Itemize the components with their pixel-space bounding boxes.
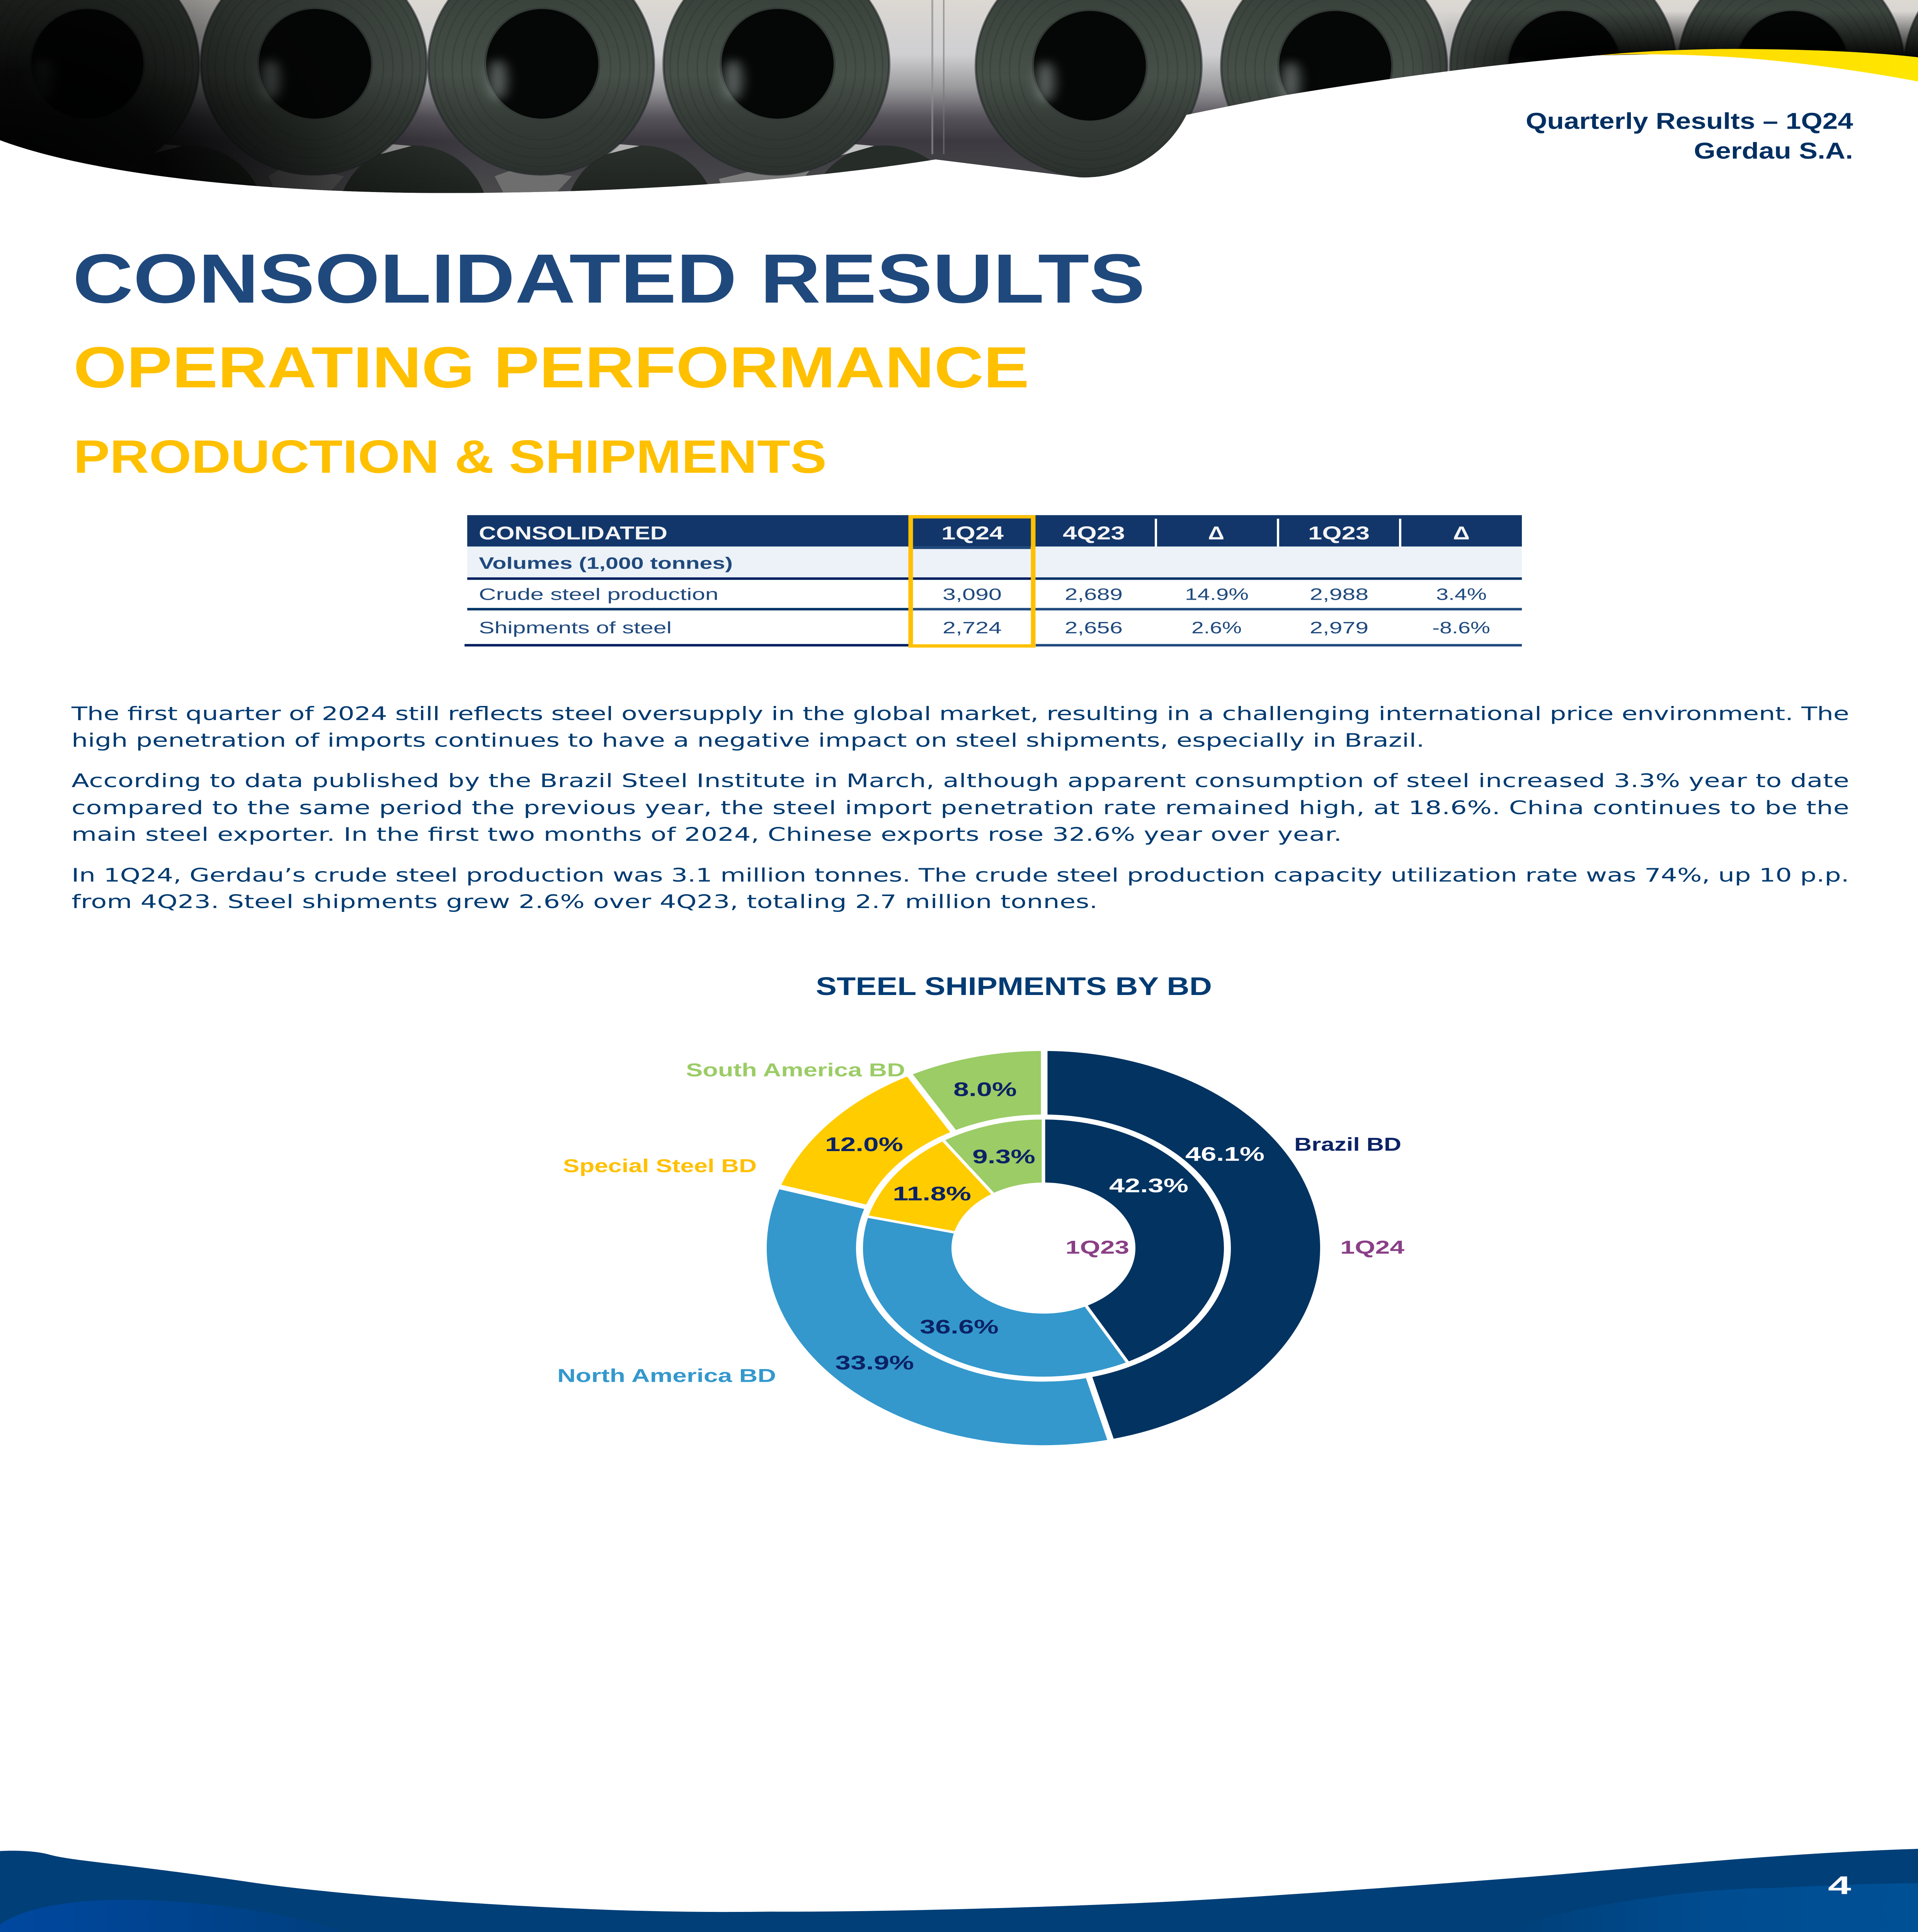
text block: market commentary: In 1Q24, Gerdau’s crude steel production was 3.1 million tonnes. The crude steel production capacity utilization rate was 74%, up 10 p.p.: [71, 864, 1849, 886]
table header row: 1Q24: [941, 523, 1004, 544]
table: consolidated volumes: [465, 515, 1522, 646]
data labels: [825, 1078, 1264, 1374]
table header row: [479, 523, 1470, 544]
header yellow swoosh: [1597, 49, 1918, 82]
footer wave: [0, 1849, 1918, 1932]
series label: 1Q23: 1Q23: [1065, 1237, 1129, 1258]
table row: crude steel production: 14.9%: [1185, 585, 1249, 604]
table header row: Δ: [1208, 523, 1224, 544]
heading: operating performance: OPERATING PERFORMANCE: [73, 335, 1029, 400]
data labels: 12.0%: [825, 1133, 903, 1156]
data labels: 33.9%: [835, 1352, 914, 1374]
text block: market commentary: high penetration of imports continues to have a negative impact on steel shipments, especially in Brazil.: [71, 730, 1424, 751]
data labels: 36.6%: [920, 1316, 999, 1338]
table row: crude steel production: 3.4%: [1436, 585, 1487, 604]
outer ring: 1Q24: [767, 1046, 1320, 1446]
table row: crude steel production: 3,090: [943, 585, 1002, 604]
table row: shipments of steel: 2,979: [1310, 619, 1368, 637]
table row: shipments of steel: 2,724: [943, 619, 1002, 637]
data labels: 9.3%: [972, 1146, 1035, 1168]
table row: shipments of steel: Shipments of steel: [479, 619, 672, 637]
text block: market commentary: According to data published by the Brazil Steel Institute in March, although apparent consumption of steel increased 3.3% year to date: [71, 770, 1849, 792]
title: consolidated results: CONSOLIDATED RESULTS: [73, 240, 1145, 318]
text block: market commentary: from 4Q23. Steel shipments grew 2.6% over 4Q23, totaling 2.7 million tonnes.: [71, 891, 1098, 912]
data labels: 46.1%: [1185, 1143, 1264, 1165]
table header row: 1Q23: [1308, 523, 1370, 544]
text block: market commentary: compared to the same period the previous year, the steel import penetration rate remained high, at 18.6%. China continues to be the: [71, 797, 1849, 819]
header text: report name: Quarterly Results – 1Q24: [1526, 109, 1853, 134]
table header row: 4Q23: [1063, 523, 1125, 544]
table section row: volumes: Volumes (1,000 tonnes): [479, 554, 733, 573]
donut chart: steel shipments by BD: [557, 1046, 1404, 1446]
table row: shipments of steel: -8.6%: [1432, 619, 1490, 637]
table row: crude steel production: Crude steel production: [479, 585, 718, 604]
page number: 4: [1828, 1871, 1851, 1900]
table row: shipments of steel: 2,656: [1065, 619, 1123, 637]
legend label: South America BD: South America BD: [686, 1060, 905, 1080]
legend label: North America BD: North America BD: [557, 1365, 776, 1386]
table row: shipments of steel: 2.6%: [1191, 619, 1242, 637]
legend label: Brazil BD: Brazil BD: [1294, 1134, 1401, 1155]
heading: production and shipments: PRODUCTION & SHIPMENTS: [73, 430, 827, 483]
data labels: 8.0%: [953, 1078, 1017, 1100]
table header row: CONSOLIDATED: [479, 523, 667, 544]
header text: report name: [1526, 109, 1853, 164]
series label: 1Q24: 1Q24: [1340, 1237, 1404, 1258]
text block: market commentary: main steel exporter. In the first two months of 2024, Chinese exports rose 32.6% year over year.: [71, 824, 1342, 845]
table row: crude steel production: 2,988: [1310, 585, 1368, 604]
table header row: Δ: [1453, 523, 1470, 544]
table row: crude steel production: 2,689: [1065, 585, 1123, 604]
highlight box: 1Q24 column: [910, 517, 1033, 646]
table row: crude steel production: [479, 585, 1487, 604]
data labels: 42.3%: [1109, 1174, 1188, 1197]
header photo: steel coils: [0, 0, 1918, 193]
chart title: STEEL SHIPMENTS BY BD: [816, 972, 1212, 1000]
text block: market commentary: The first quarter of 2024 still reflects steel oversupply in the global market, resulting in a challenging international price environment. The: [71, 703, 1849, 724]
legend label: Special Steel BD: Special Steel BD: [563, 1155, 757, 1176]
inner ring: 1Q23: [859, 1117, 1227, 1379]
data labels: 11.8%: [893, 1183, 971, 1205]
table row: shipments of steel: [479, 619, 1490, 637]
header text: report name: Gerdau S.A.: [1694, 138, 1853, 164]
text block: market commentary: [71, 703, 1849, 912]
